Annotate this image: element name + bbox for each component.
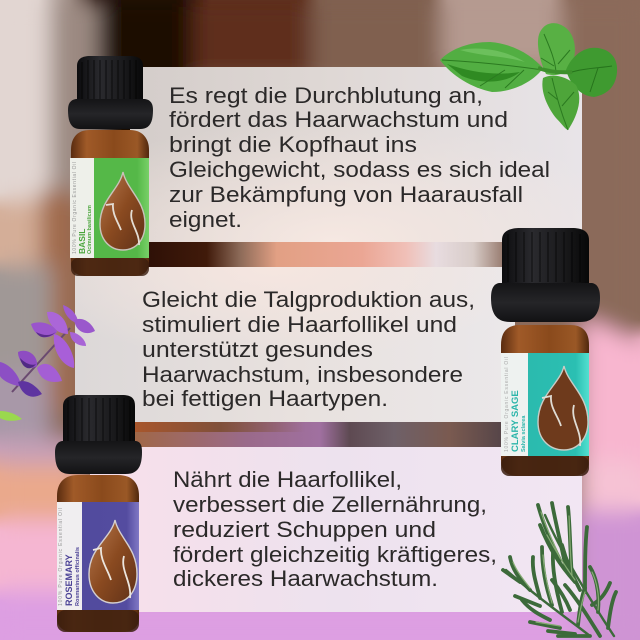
bottle glass: [501, 325, 589, 476]
text: clary sage benefits: stimuliert die Haarfollikel und: [142, 312, 457, 337]
text: basil benefits: eignet.: [169, 207, 242, 232]
label: rosemary: ROSEMARY: [64, 554, 74, 606]
bottle glass: [71, 130, 149, 276]
text: rosemary benefits: dickeres Haarwachstum.: [173, 566, 438, 591]
bottle: clary sage: [491, 228, 600, 476]
text: clary sage benefits: unterstützt gesundes: [142, 337, 373, 362]
panel: clary sage: [75, 267, 515, 422]
label: clary sage: CLARY SAGE: [510, 390, 521, 452]
icon: oil drop: [538, 366, 588, 450]
label: basil: [70, 158, 149, 258]
text: basil benefits: Gleichgewicht, sodass es sich ideal: [169, 157, 550, 182]
text: clary sage benefits: [142, 287, 475, 411]
label: basil: 100% Pure Organic Essential Oil: [72, 162, 78, 254]
icon: oil drop: [89, 520, 137, 603]
label: clary sage: Salvia sclarea: [521, 415, 527, 452]
icon: purple sage sprig: [0, 305, 95, 421]
text: basil benefits: bringt die Kopfhaut ins: [169, 132, 417, 157]
text: clary sage benefits: Haarwachstum, insbesondere: [142, 362, 463, 387]
label: rosemary: 100% Pure Organic Essential Oil: [58, 508, 64, 606]
text: basil benefits: zur Bekämpfung von Haarausfall: [169, 182, 523, 207]
bottle cap: [502, 228, 589, 283]
bottle cap: [77, 56, 143, 100]
label: basil: BASIL: [77, 228, 87, 254]
bottle: basil: [68, 56, 153, 276]
text: rosemary benefits: reduziert Schuppen und: [173, 517, 436, 542]
panel: basil: [130, 67, 582, 242]
label: rosemary: Rosmarinus officinalis: [75, 547, 81, 606]
text: basil benefits: fördert das Haarwachstum und: [169, 107, 508, 132]
label: clary sage: [501, 353, 589, 456]
label: rosemary: [57, 502, 139, 610]
band between panels two and three: [135, 422, 505, 447]
text: rosemary benefits: [173, 467, 497, 591]
text: basil benefits: [169, 83, 550, 232]
icon: oil drop: [100, 172, 145, 250]
text: rosemary benefits: verbessert die Zellernährung,: [173, 492, 487, 517]
icon: rosemary sprig: [503, 503, 616, 636]
text: basil benefits: Es regt die Durchblutung an,: [169, 83, 483, 108]
icon: basil leaves: [440, 23, 617, 130]
text: rosemary benefits: fördert gleichzeitig kräftigeres,: [173, 542, 497, 567]
band between panels one and two: [140, 242, 510, 267]
text: rosemary benefits: Nährt die Haarfollikel,: [173, 467, 402, 492]
text: clary sage benefits: bei fettigen Haartypen.: [142, 386, 388, 411]
bottle glass: [57, 475, 139, 632]
text: clary sage benefits: Gleicht die Talgproduktion aus,: [142, 287, 475, 312]
label: clary sage: 100% Pure Organic Essential Oil: [504, 357, 510, 452]
bottle: rosemary: [55, 395, 142, 632]
bottle cap: [63, 395, 135, 442]
label: basil: Ocimum basilicum: [87, 205, 93, 254]
panel: rosemary: [90, 447, 582, 612]
